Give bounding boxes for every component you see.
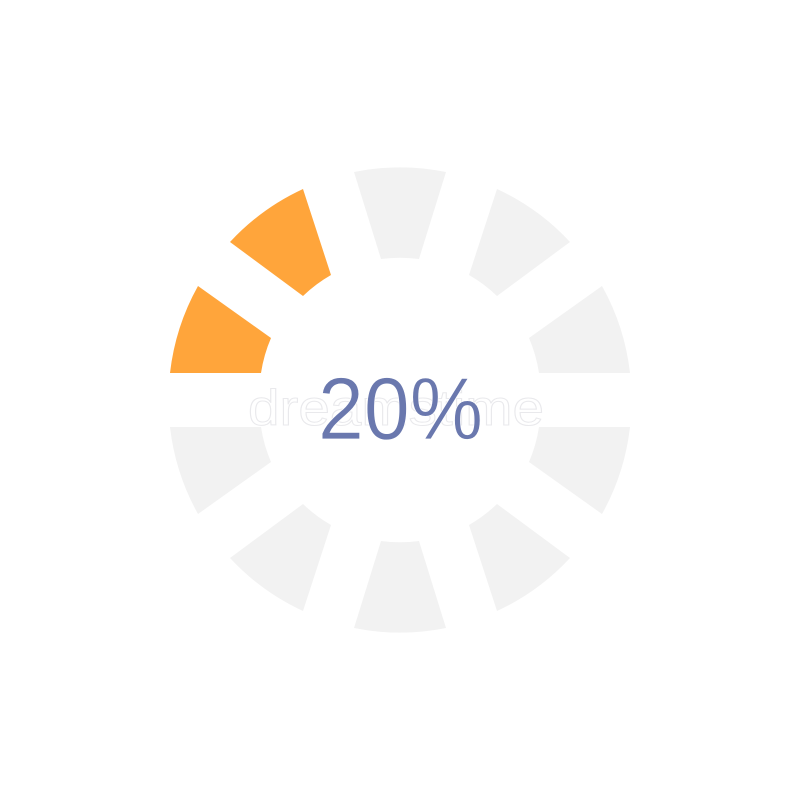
segment: grey upper right	[469, 189, 570, 296]
segment: orange upper left	[230, 189, 331, 296]
segment: orange left	[170, 286, 271, 373]
watermark: dreamstime	[248, 380, 544, 436]
progress ring	[170, 167, 630, 633]
segment: grey lower right	[469, 504, 570, 611]
segment: grey bottom	[354, 541, 446, 633]
segment: grey left lower	[170, 427, 271, 514]
percentage label: 20%	[318, 359, 483, 458]
segment: grey lower left	[230, 504, 331, 611]
segment: grey right upper	[529, 286, 630, 373]
segment: grey right lower	[529, 427, 630, 514]
segment: grey top	[354, 167, 446, 259]
